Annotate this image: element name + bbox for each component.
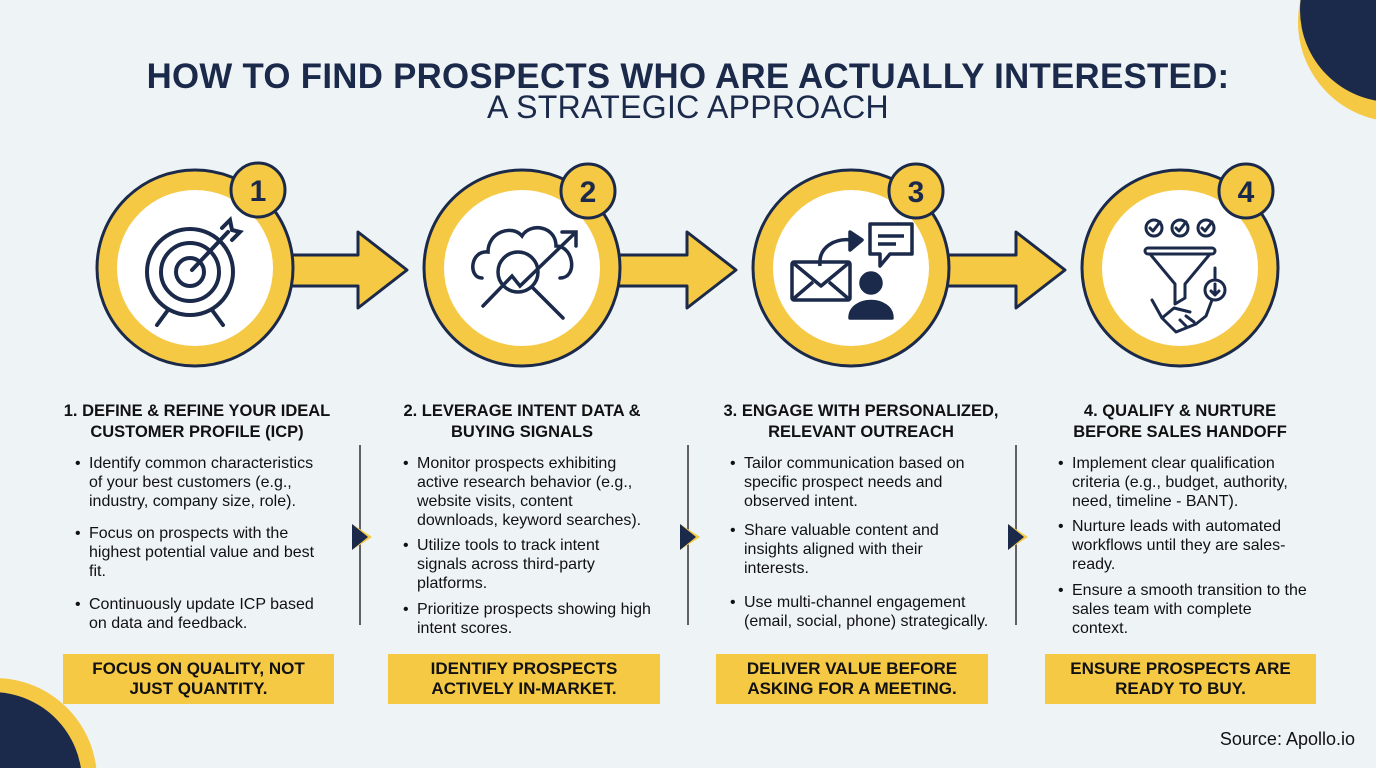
callout 1: FOCUS ON QUALITY, NOT [92,659,305,678]
heading 4 [1073,402,1287,441]
step circles and arrows: 1 [250,175,266,208]
bullets 3: Tailor communication based on specific prospect needs and observed intent. [744,455,965,510]
icon: target [147,220,240,325]
bullets 3: Use multi-channel engagement (email, social, phone) strategically. [744,594,988,630]
callout 3: ASKING FOR A MEETING. [747,679,957,698]
heading 3: 3. ENGAGE WITH PERSONALIZED, [723,402,999,420]
heading 4: 4. QUALIFY & NURTURE [1084,402,1276,420]
bullets 1: Focus on prospects with the highest potential value and best fit. [89,525,314,580]
bullets 3: Share valuable content and insights aligned with their interests. [744,522,939,577]
callout 4 [1045,654,1316,704]
heading 3 [723,402,999,441]
subtitle: A STRATEGIC APPROACH [487,89,889,125]
dividers [352,445,1028,625]
heading 2 [403,402,641,441]
callout 1 [63,654,334,704]
panel: step 3 [723,402,999,630]
callout 2: ACTIVELY IN-MARKET. [431,679,617,698]
bullets 2: Prioritize prospects showing high intent scores. [417,601,651,637]
panel: step 1 [64,402,330,632]
callout 3 [716,654,988,704]
step circles and arrows: 2 [580,176,596,209]
callout 4: ENSURE PROSPECTS ARE [1070,659,1291,678]
bullets 1 [76,455,314,632]
bullets 2: Utilize tools to track intent signals across third-party platforms. [417,537,599,592]
source: Source: Apollo.io [1220,729,1355,749]
bullets 1: Continuously update ICP based on data and feedback. [89,596,314,632]
step circles and arrows [96,162,1280,368]
icon: email and person [792,224,912,318]
title: HOW TO FIND PROSPECTS WHO ARE ACTUALLY INTERESTED: [147,57,1229,96]
bullets 4: Ensure a smooth transition to the sales team with complete context. [1072,582,1307,637]
heading 4: BEFORE SALES HANDOFF [1073,423,1287,441]
icon: funnel handshake [1145,220,1225,332]
bullets 4 [1058,455,1307,637]
panel: step 4 [1058,402,1307,637]
step circles and arrows: 4 [1238,176,1255,209]
heading 3: RELEVANT OUTREACH [768,423,954,441]
heading 1: CUSTOMER PROFILE (ICP) [90,423,304,441]
bullets 2 [404,455,651,637]
heading 2: 2. LEVERAGE INTENT DATA & [403,402,641,420]
callout 2 [388,654,660,704]
bullets 2: Monitor prospects exhibiting active research behavior (e.g., website visits, content downloads, keyword searches). [417,455,641,529]
bullets 4: Implement clear qualification criteria (e.g., budget, authority, need, timeline - BANT). [1072,455,1288,510]
callout 1: JUST QUANTITY. [130,679,267,698]
heading 1: 1. DEFINE & REFINE YOUR IDEAL [64,402,330,420]
panel: step 2 [403,402,651,637]
heading 1 [64,402,330,441]
bullets 4: Nurture leads with automated workflows until they are sales-ready. [1072,518,1285,573]
bullets 3 [730,455,988,630]
callout 3: DELIVER VALUE BEFORE [747,659,957,678]
heading 2: BUYING SIGNALS [451,423,593,441]
bullets 1: Identify common characteristics of your best customers (e.g., industry, company size, role). [89,455,313,510]
callout 4: READY TO BUY. [1115,679,1246,698]
icon: cloud search [473,228,576,318]
step circles and arrows: 3 [908,176,924,209]
callout 2: IDENTIFY PROSPECTS [431,659,617,678]
